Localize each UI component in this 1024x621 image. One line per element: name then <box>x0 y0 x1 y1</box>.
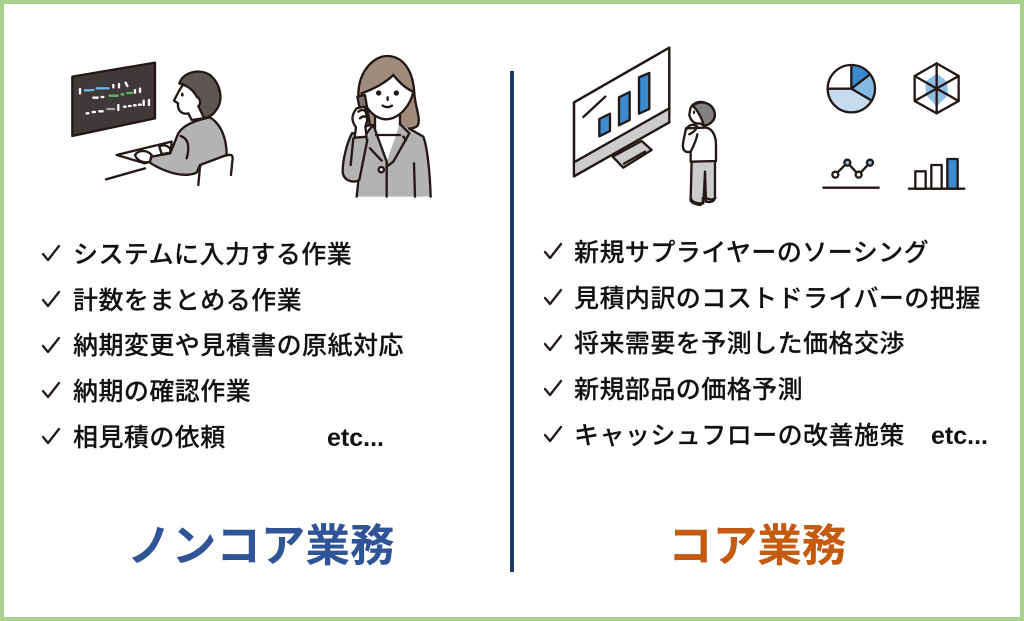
icon: radar chart <box>915 63 959 113</box>
item 1: システムに入力する作業 <box>73 241 352 269</box>
heading: core work: コア業務 <box>668 522 846 571</box>
etc note: etc... <box>931 422 988 450</box>
check mark 4 <box>545 381 561 395</box>
icon: line chart <box>823 160 879 188</box>
etc note: etc... <box>327 424 384 452</box>
item 4: 新規部品の価格予測 <box>574 376 803 404</box>
check mark 5 <box>545 427 561 441</box>
check mark 5 <box>43 429 59 443</box>
item 3: 納期変更や見積書の原紙対応 <box>73 332 404 360</box>
item 5: 相見積の依頼 <box>73 424 226 452</box>
icon: woman on phone <box>343 56 431 197</box>
heading: non-core work: ノンコア業務 <box>127 522 395 571</box>
icon: bar chart <box>909 159 964 189</box>
check mark 1 <box>545 244 561 258</box>
checklist: non-core tasks <box>43 241 404 452</box>
check mark 2 <box>545 290 561 304</box>
item 1: 新規サプライヤーのソーシング <box>574 239 929 267</box>
item 4: 納期の確認作業 <box>73 378 251 406</box>
check mark 2 <box>43 292 59 306</box>
icon: person typing at computer <box>72 63 233 185</box>
item 2: 見積内訳のコストドライバーの把握 <box>574 285 981 313</box>
check mark 3 <box>43 338 59 352</box>
vertical divider <box>510 71 514 572</box>
check mark 4 <box>43 383 59 397</box>
icon: person looking at monitor chart <box>574 48 716 205</box>
icon: pie chart <box>828 65 875 112</box>
check mark 3 <box>545 336 561 350</box>
item 5: キャッシュフローの改善施策 <box>574 422 905 450</box>
item 3: 将来需要を予測した価格交渉 <box>574 330 905 358</box>
item 2: 計数をまとめる作業 <box>73 287 302 315</box>
check mark 1 <box>43 246 59 260</box>
checklist: core tasks <box>545 239 988 450</box>
